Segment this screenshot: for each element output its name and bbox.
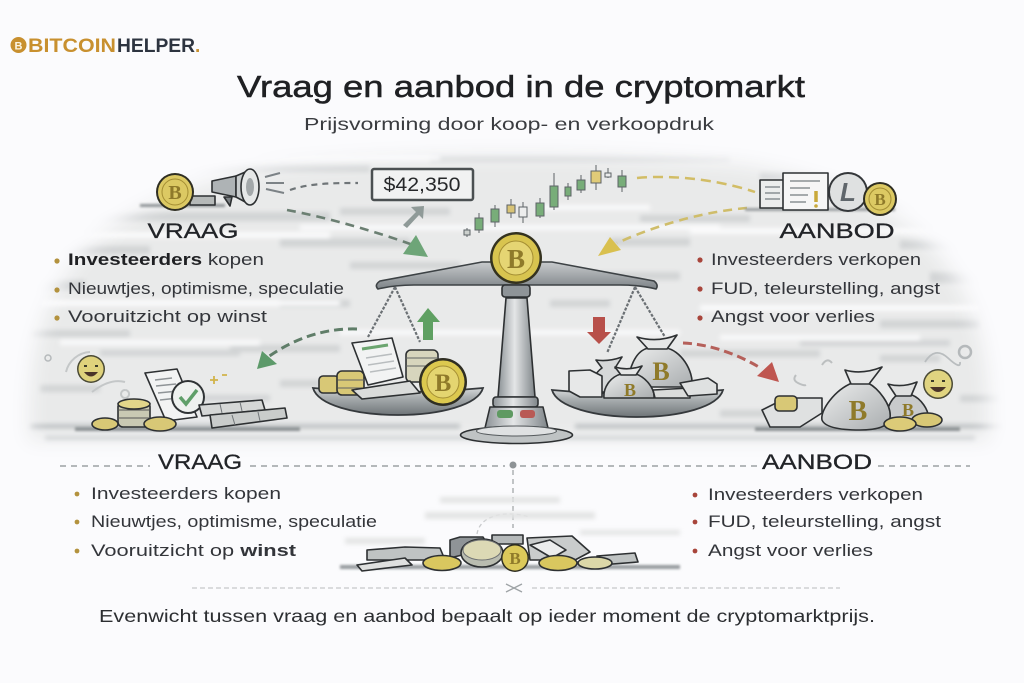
icon: documents and coins (745, 172, 897, 216)
arrow: yellow dashed to scale (598, 208, 747, 256)
icon: coin and megaphone: B (168, 182, 182, 204)
column (460, 285, 572, 444)
logo: BitcoinHelper: BITCOIN (28, 36, 116, 57)
panel: upper demand: Nieuwtjes, optimisme, speculatie (68, 279, 344, 298)
arrow: yellow dashed from supply icon (637, 177, 755, 192)
logo: BitcoinHelper: B (15, 40, 23, 52)
scene: lower left happy buyer (45, 352, 300, 431)
panel: lower demand (75, 451, 377, 560)
subtitle: Prijsvorming door koop- en verkoopdruk (304, 114, 714, 134)
right pan (552, 390, 723, 417)
panel: lower supply: AANBOD (762, 451, 872, 474)
panel: upper demand: Vooruitzicht op winst (68, 307, 267, 326)
panel: lower supply: FUD, teleurstelling, angst (708, 512, 941, 531)
panel: lower supply (693, 451, 941, 560)
right pan contents: B (652, 357, 670, 386)
arrow: green dashed to scale (287, 210, 428, 257)
panel: upper supply: AANBOD (780, 220, 894, 243)
right pan contents: B (624, 380, 636, 400)
arrow: grey up to price (403, 206, 424, 228)
balance scale (313, 232, 723, 444)
pile of coins and cash: B (509, 549, 521, 568)
panel: lower demand: VRAAG (158, 451, 242, 474)
left chains (368, 287, 420, 342)
icon: documents and coins: B (874, 190, 886, 209)
arrow: red down (587, 317, 611, 344)
title: Vraag en aanbod in de cryptomarkt (237, 69, 805, 104)
logo: BitcoinHelper (10, 36, 200, 57)
beam (376, 262, 657, 289)
price box: $42,350 (384, 175, 460, 196)
candlestick chart (464, 165, 626, 237)
panel: upper supply: Investeerders verkopen (711, 250, 921, 269)
left pan contents: B (435, 370, 451, 397)
panel: upper demand: VRAAG (148, 220, 238, 243)
panel: lower demand: Vooruitzicht op winst (91, 541, 296, 560)
left pan (313, 388, 483, 415)
scene: lower right money bags: B (849, 396, 867, 427)
panel: upper supply: FUD, teleurstelling, angst (711, 279, 940, 298)
divider line with centre dot (60, 462, 970, 534)
hub coin: B (507, 244, 525, 274)
footer conclusion: Evenwicht tussen vraag en aanbod bepaalt op ieder moment de cryptomarktprijs. (99, 606, 875, 626)
price box (372, 169, 473, 200)
panel: upper demand: Investeerders kopen (68, 250, 264, 269)
scene: lower right money bags: B (902, 400, 914, 420)
icon: documents and coins: L (840, 177, 856, 207)
icon: coin and megaphone (140, 169, 284, 211)
divider line with cross (192, 584, 840, 592)
pile of coins and cash (340, 497, 680, 572)
logo: BitcoinHelper: HELPER (117, 36, 195, 57)
right chains (607, 287, 665, 353)
panel: upper demand (54, 220, 344, 326)
arrow: green up (417, 308, 440, 340)
background wash (27, 152, 997, 444)
panel: lower supply: Investeerders verkopen (708, 485, 923, 504)
arrow: green dashed down left (257, 329, 357, 369)
panel: lower supply: Angst voor verlies (708, 541, 873, 560)
logo: BitcoinHelper: . (195, 36, 200, 57)
arrow: dashed grey to price (290, 183, 358, 190)
hub coin (490, 232, 542, 284)
panel: lower demand: Nieuwtjes, optimisme, speculatie (91, 512, 377, 531)
right pan contents (569, 335, 717, 400)
panel: upper supply (697, 220, 940, 326)
arrow: red dashed down right (683, 343, 779, 382)
panel: upper supply: Angst voor verlies (711, 307, 875, 326)
left pan contents (319, 338, 467, 406)
scene: lower right money bags (755, 346, 971, 431)
panel: lower demand: Investeerders kopen (91, 484, 281, 503)
